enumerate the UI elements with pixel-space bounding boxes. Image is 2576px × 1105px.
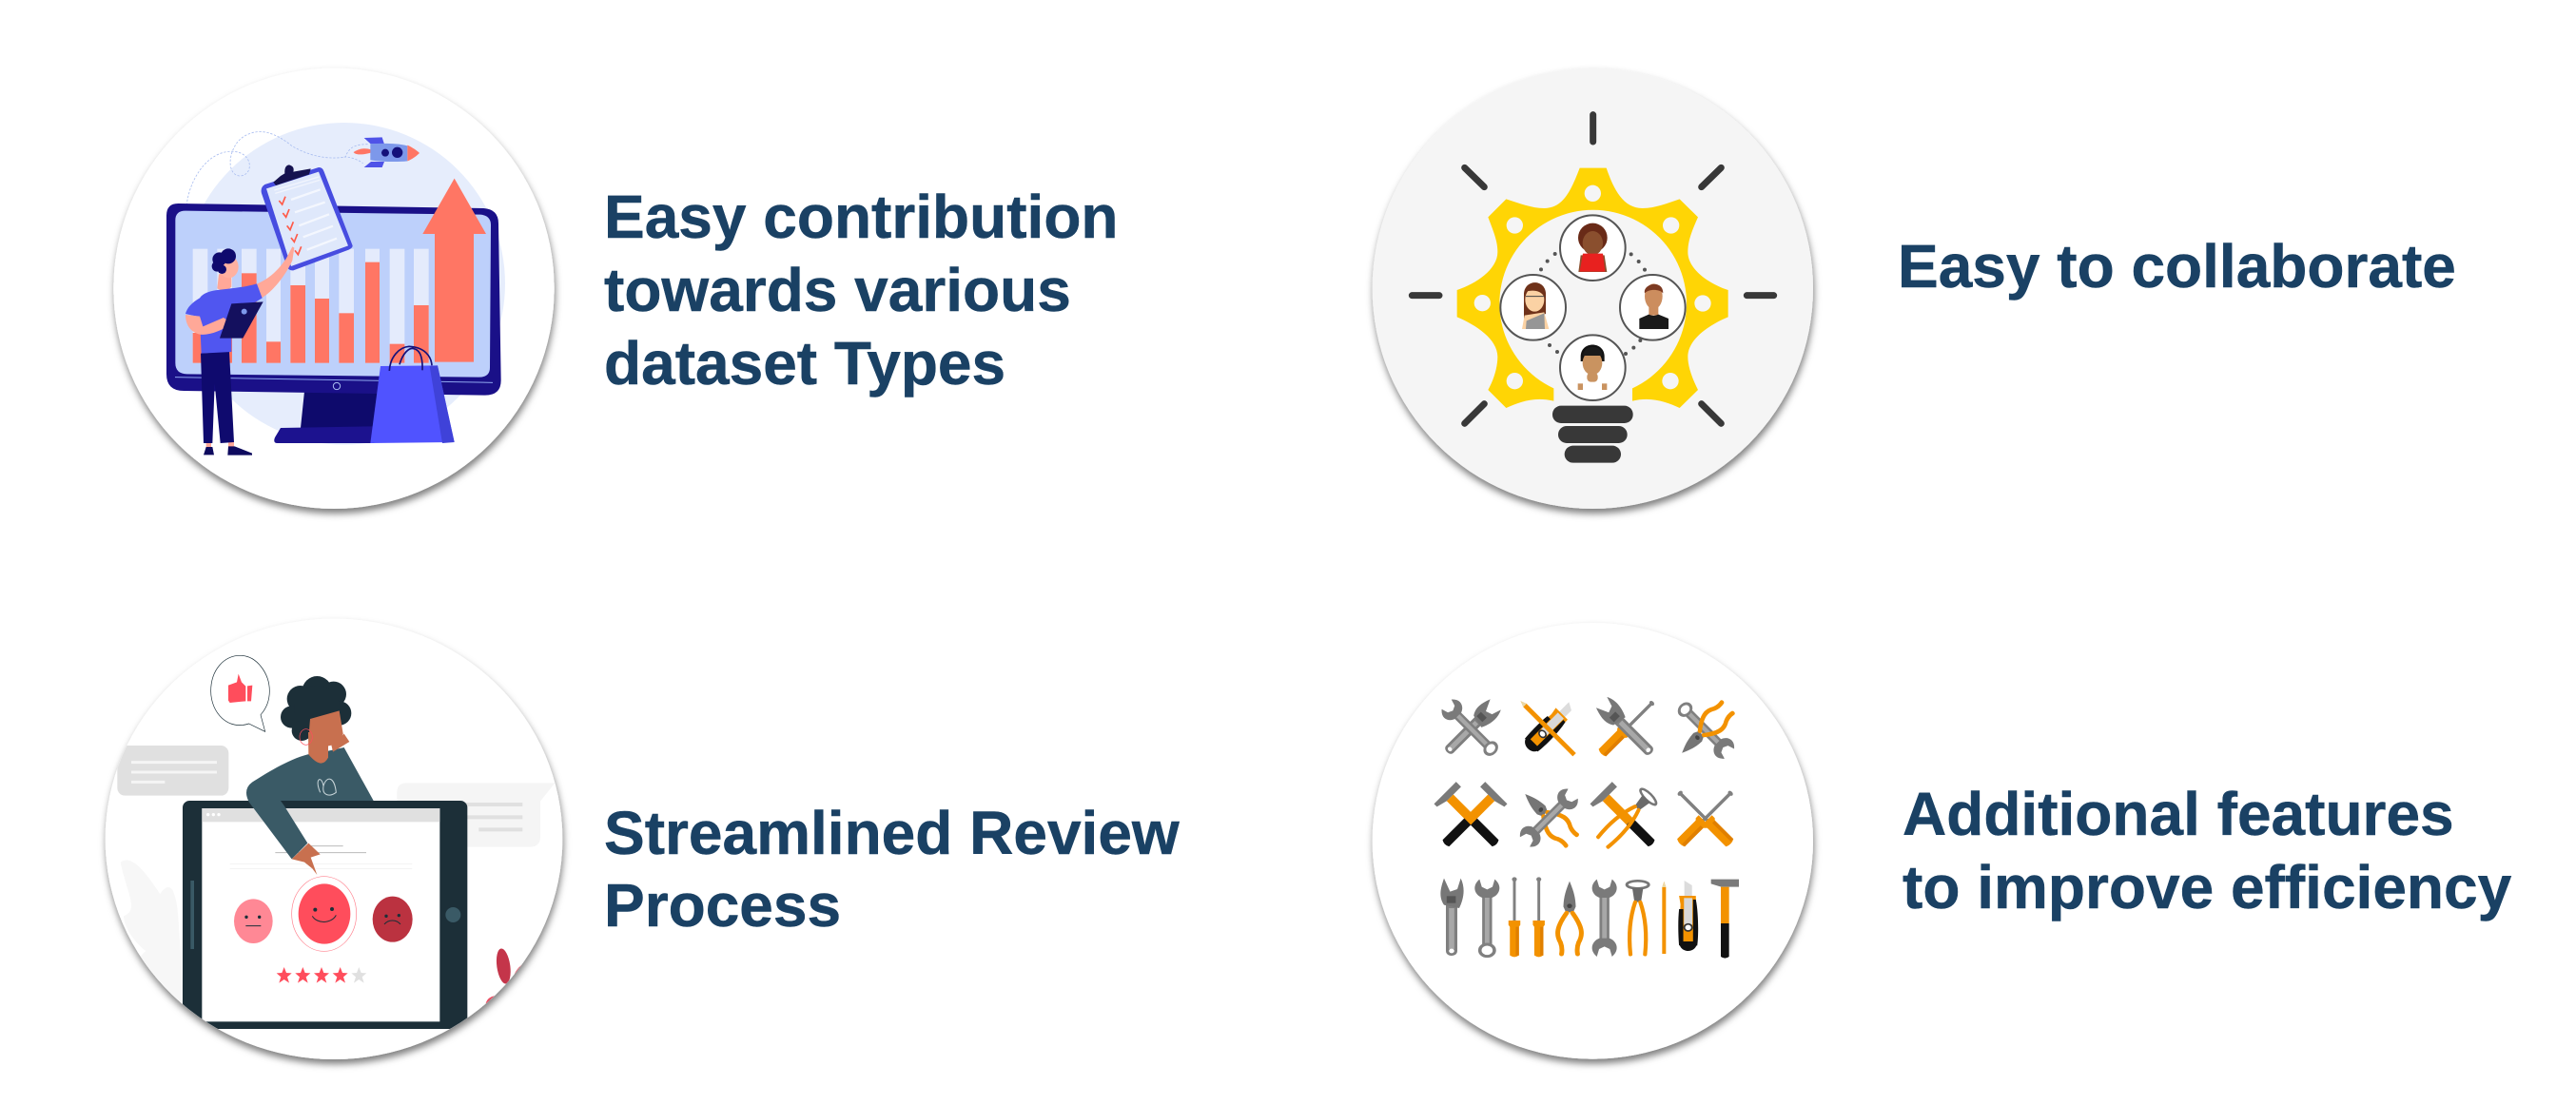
text: easy contribution: towards various <box>604 256 1071 324</box>
text: easy contribution: dataset Types <box>604 329 1005 397</box>
red plant <box>485 949 521 1004</box>
panel: streamlined review <box>106 619 562 1059</box>
bulb base <box>1552 406 1633 463</box>
icon: tools set <box>1373 623 1813 1059</box>
leaf background <box>146 964 181 1002</box>
bar chart <box>193 249 429 363</box>
tools row 3 <box>1440 877 1739 959</box>
gray comment bubble <box>117 746 228 796</box>
text: easy contribution: Easy contribution <box>604 183 1119 251</box>
dashed rocket trail <box>186 132 368 209</box>
icon: tablet review illustration <box>106 619 562 1059</box>
icon: circle with analytics illustration <box>113 68 555 509</box>
monitor <box>166 204 501 443</box>
tablet <box>183 801 467 1029</box>
gear bulb <box>1457 168 1728 408</box>
arrow up <box>422 179 486 362</box>
woman <box>246 676 374 875</box>
panel: easy to collaborate <box>1373 68 2456 509</box>
crossed tools row 1 <box>1438 695 1737 762</box>
avatar: man with cap <box>1560 335 1626 400</box>
panel: easy contribution <box>113 68 1119 509</box>
text: additional features: Additional features <box>1903 780 2454 848</box>
hair <box>281 676 351 741</box>
crossed tools row 2 <box>1434 782 1737 855</box>
shopping bag <box>370 346 455 443</box>
avatar: woman with glasses <box>1500 275 1566 340</box>
text: streamlined review: Process <box>604 871 841 940</box>
avatar: man black shirt <box>1620 275 1686 340</box>
person with tablet <box>185 246 294 456</box>
stars <box>277 967 366 983</box>
text: streamlined review: Streamlined Review <box>604 799 1180 867</box>
panel: additional features <box>1373 623 2512 1059</box>
clipboard checklist <box>262 165 353 270</box>
speech bubble thumbs up <box>211 655 269 731</box>
rocket <box>354 137 420 167</box>
faces rating <box>234 877 413 951</box>
icon: light bulb gear with team <box>1373 68 1813 509</box>
avatar: woman red shirt <box>1560 215 1626 281</box>
light comment bubble <box>397 783 555 847</box>
rays <box>1412 115 1774 423</box>
text: easy to collaborate: Easy to collaborate <box>1898 232 2456 300</box>
text: additional features: to improve efficiency <box>1903 853 2512 921</box>
connecting dots <box>1539 252 1647 356</box>
